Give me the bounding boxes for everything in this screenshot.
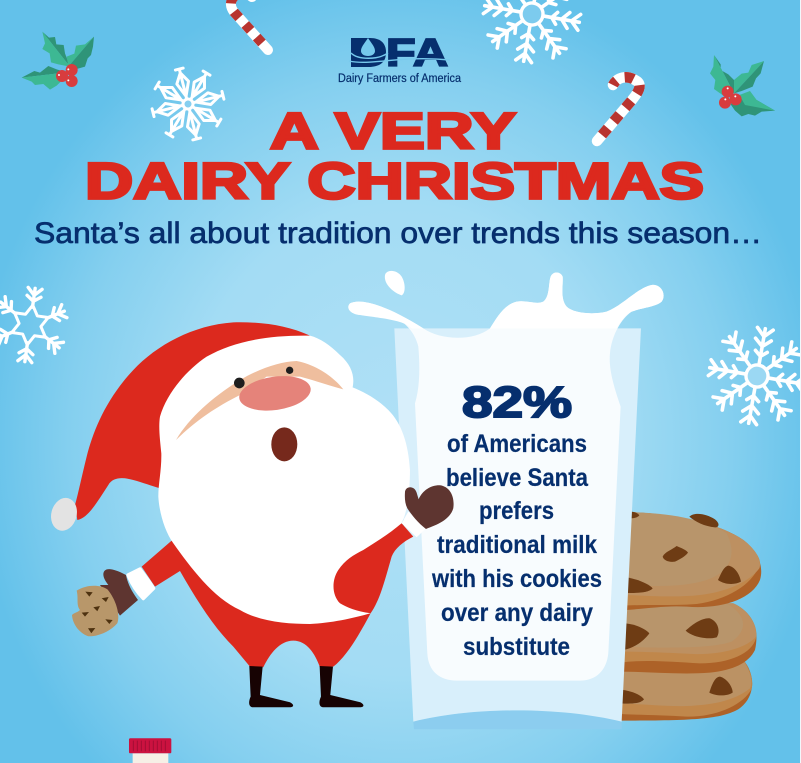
glass body xyxy=(394,328,641,722)
cookie: middle xyxy=(620,603,756,673)
icon: snowflake top centre xyxy=(476,0,588,70)
cookie in hand xyxy=(72,586,118,636)
cookie: top xyxy=(620,511,761,610)
milk and splash xyxy=(348,273,664,681)
statement: believe Santa xyxy=(446,464,589,492)
title: DAIRY CHRISTMAS xyxy=(85,152,704,210)
icon: candy cane right xyxy=(597,77,640,141)
left cuff xyxy=(128,569,154,599)
boots xyxy=(249,666,363,707)
milk drop xyxy=(385,271,405,295)
statement: prefers xyxy=(479,497,554,525)
milk bottle cap xyxy=(129,738,171,763)
statement: with his cookies xyxy=(431,565,602,593)
santa suit xyxy=(142,523,413,667)
santa hat xyxy=(75,322,310,520)
glass of milk xyxy=(348,271,664,729)
logo: Dairy Farmers of America: DFA xyxy=(351,32,448,75)
subtitle: Santa’s all about tradition over trends this season… xyxy=(34,217,762,250)
icon: holly left xyxy=(22,32,94,90)
statement: substitute xyxy=(463,633,570,661)
icon: snowflake left xyxy=(0,283,70,367)
statement: over any dairy xyxy=(441,599,593,627)
icon: candy cane top xyxy=(231,0,268,50)
hat pompom xyxy=(47,495,81,534)
nose xyxy=(237,372,313,415)
right mitten xyxy=(405,485,454,529)
mouth xyxy=(271,427,297,461)
title xyxy=(85,102,704,210)
icon: holly right xyxy=(710,55,775,116)
icon: snowflake upper left xyxy=(144,60,232,148)
title: A VERY xyxy=(270,102,516,160)
santa xyxy=(47,322,454,707)
statement xyxy=(431,430,602,661)
cookie stack xyxy=(620,511,761,721)
statement: of Americans xyxy=(447,430,587,458)
logo: Dairy Farmers of America: Dairy Farmers of America xyxy=(338,73,462,85)
right cuff xyxy=(402,512,427,537)
beard and hat brim xyxy=(158,336,410,624)
eyes xyxy=(234,367,293,388)
cookie: bottom xyxy=(620,660,752,721)
icon: snowflake right xyxy=(701,320,801,432)
face xyxy=(176,361,343,440)
glass base xyxy=(413,710,622,729)
statement: traditional milk xyxy=(437,531,597,559)
left mitten xyxy=(100,569,138,616)
statistic text xyxy=(431,378,602,661)
big number: 82% xyxy=(462,378,572,427)
logo: Dairy Farmers of America xyxy=(338,32,462,85)
